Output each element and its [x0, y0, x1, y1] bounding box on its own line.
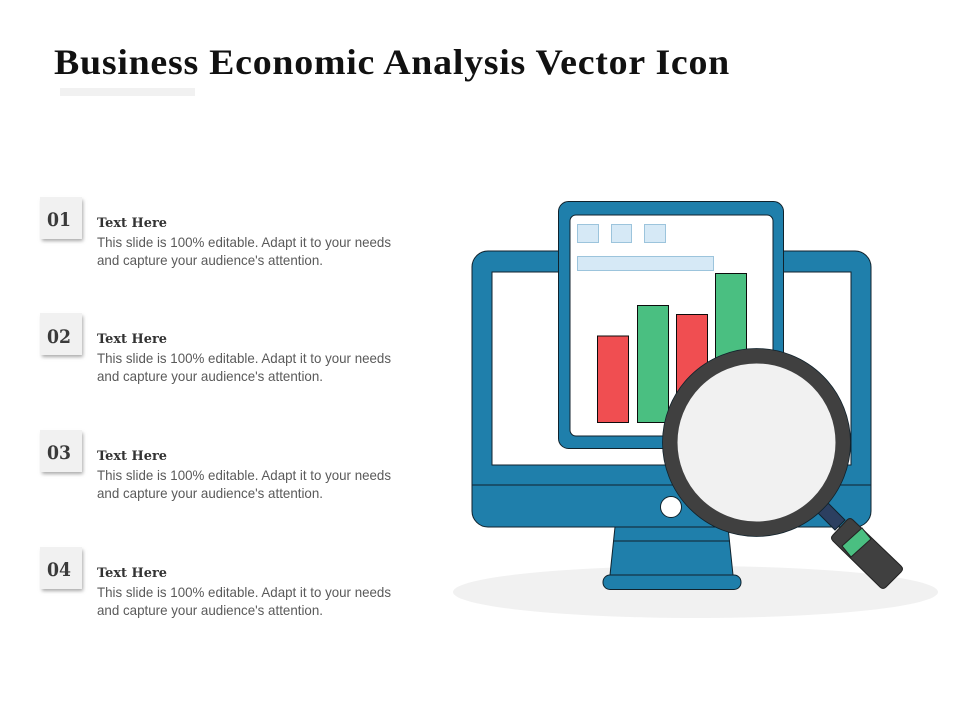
item 02: and capture your audience's attention. [97, 368, 323, 384]
item 03: and capture your audience's attention. [97, 485, 323, 501]
item 04: and capture your audience's attention. [97, 602, 323, 618]
item 02 [40, 313, 391, 384]
icon: tablet with bar chart [558, 202, 784, 448]
item 02: Text Here [97, 332, 167, 347]
icon: desktop monitor [472, 251, 871, 590]
item 03: This slide is 100% editable. Adapt it to your needs [97, 467, 391, 483]
item 01 [40, 197, 391, 268]
title: Business Economic Analysis Vector Icon [54, 42, 730, 82]
header placeholders [578, 224, 714, 270]
item 01: 01 [47, 209, 71, 231]
item 04 [40, 547, 391, 618]
item 03: 03 [47, 442, 71, 464]
item 01: This slide is 100% editable. Adapt it to your needs [97, 234, 391, 250]
item 01: and capture your audience's attention. [97, 252, 323, 268]
title underline [60, 88, 195, 96]
bar chart [598, 274, 746, 422]
item 04: This slide is 100% editable. Adapt it to your needs [97, 584, 391, 600]
item 02: This slide is 100% editable. Adapt it to your needs [97, 350, 391, 366]
item 04: Text Here [97, 566, 167, 581]
item 01: Text Here [97, 216, 167, 231]
ground shadow [453, 566, 938, 618]
item 03 [40, 430, 391, 501]
item 02: 02 [47, 326, 71, 348]
icon: magnifying glass [662, 348, 902, 588]
item 03: Text Here [97, 449, 167, 464]
item 04: 04 [47, 559, 71, 581]
